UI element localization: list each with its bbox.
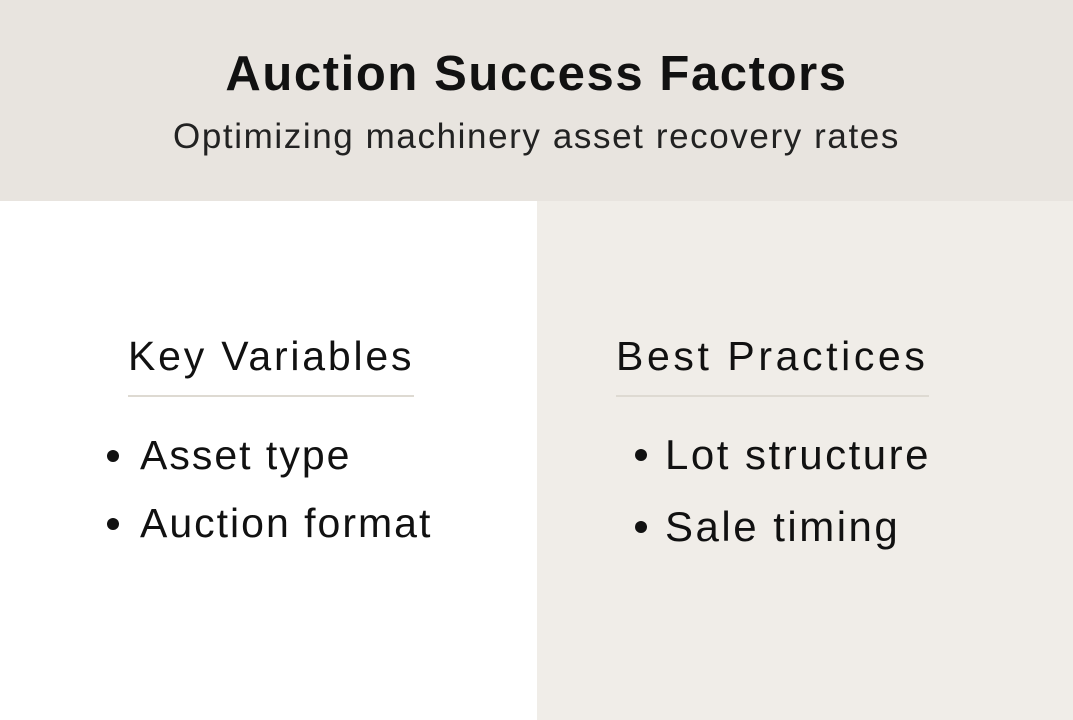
title: Auction Success Factors	[225, 47, 848, 101]
panel: key variables	[0, 201, 537, 720]
panel: best practices	[537, 201, 1073, 720]
bullet list: variables: Asset type	[140, 432, 351, 478]
header band	[0, 0, 1073, 201]
bullet list: practices	[635, 431, 931, 550]
heading: key variables: Key Variables	[128, 333, 414, 379]
bullet list: practices: Lot structure	[665, 431, 931, 478]
bullet list: variables: Auction format	[140, 500, 432, 546]
bullet list: practices: Sale timing	[665, 503, 900, 550]
bullet list: variables	[107, 432, 432, 546]
heading: best practices: Best Practices	[616, 333, 928, 379]
subtitle: Optimizing machinery asset recovery rates	[173, 117, 900, 156]
